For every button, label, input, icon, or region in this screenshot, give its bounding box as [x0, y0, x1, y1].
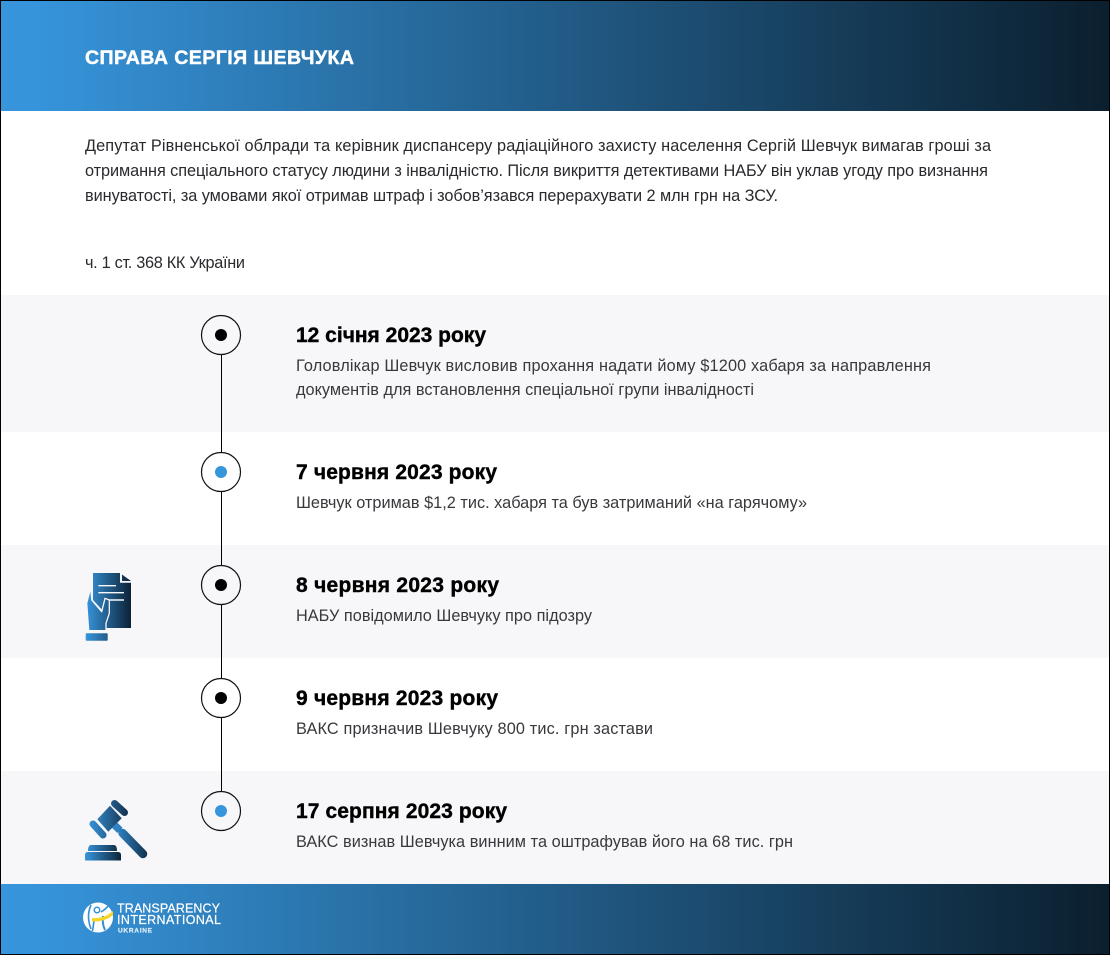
- description: [296, 357, 931, 399]
- header band: [1, 1, 1109, 111]
- timeline event: 9 June 2023: [202, 678, 653, 738]
- date: 9 червня 2023 року: [296, 687, 498, 710]
- marker: black: [202, 316, 240, 354]
- description: документів для встановлення спеціальної групи інвалідності: [296, 381, 754, 399]
- logo wordmark: [117, 902, 221, 934]
- intro text: [85, 137, 992, 205]
- description: Головлікар Шевчук висловив прохання надати йому $1200 хабаря за направлення: [296, 357, 931, 375]
- date: 8 червня 2023 року: [296, 574, 499, 597]
- marker: blue: [202, 452, 240, 492]
- description: ВАКС визнав Шевчука винним та оштрафував його на 68 тис. грн: [296, 833, 793, 851]
- icon: hand holding document: [86, 573, 131, 641]
- row backgrounds: [1, 295, 1109, 884]
- timeline line: [220, 335, 222, 811]
- date: 12 січня 2023 року: [296, 324, 486, 347]
- logo wordmark: TRANSPARENCY: [117, 902, 221, 916]
- timeline event: 7 June 2023: [202, 452, 807, 512]
- description: Шевчук отримав $1,2 тис. хабаря та був затриманий «на гарячому»: [296, 494, 807, 512]
- description: ВАКС призначив Шевчуку 800 тис. грн застави: [296, 720, 653, 738]
- marker: black: [202, 566, 240, 604]
- footer band: [1, 884, 1109, 954]
- logo: Transparency International Ukraine: [83, 902, 221, 934]
- date: 17 серпня 2023 року: [296, 800, 507, 823]
- legal article reference: ч. 1 ст. 368 КК України: [85, 254, 245, 272]
- intro text: винуватості, за умовами якої отримав штраф і зобов’язався перерахувати 2 млн грн на ЗСУ.: [85, 187, 778, 205]
- logo wordmark: UKRAINE: [118, 928, 153, 934]
- marker: black: [202, 678, 240, 718]
- logo globe: [83, 902, 113, 932]
- intro text: отримання спеціального статусу людини з інвалідністю. Після викриття детективами НАБУ він уклав угоду про визнання: [85, 162, 988, 180]
- marker: blue: [202, 792, 240, 830]
- timeline event: 17 August 2023: [202, 792, 793, 851]
- intro text: Депутат Рівненської облради та керівник диспансеру радіаційного захисту населення Сергій Шевчук вимагав гроші за: [85, 137, 992, 155]
- timeline event: 8 June 2023: [202, 566, 593, 625]
- icon: gavel: [85, 804, 143, 860]
- date: 7 червня 2023 року: [296, 461, 497, 484]
- logo wordmark: INTERNATIONAL: [117, 913, 221, 927]
- title: СПРАВА СЕРГІЯ ШЕВЧУКА: [85, 47, 354, 69]
- description: НАБУ повідомило Шевчуку про підозру: [296, 607, 593, 625]
- timeline event: 12 January 2023: [202, 316, 931, 399]
